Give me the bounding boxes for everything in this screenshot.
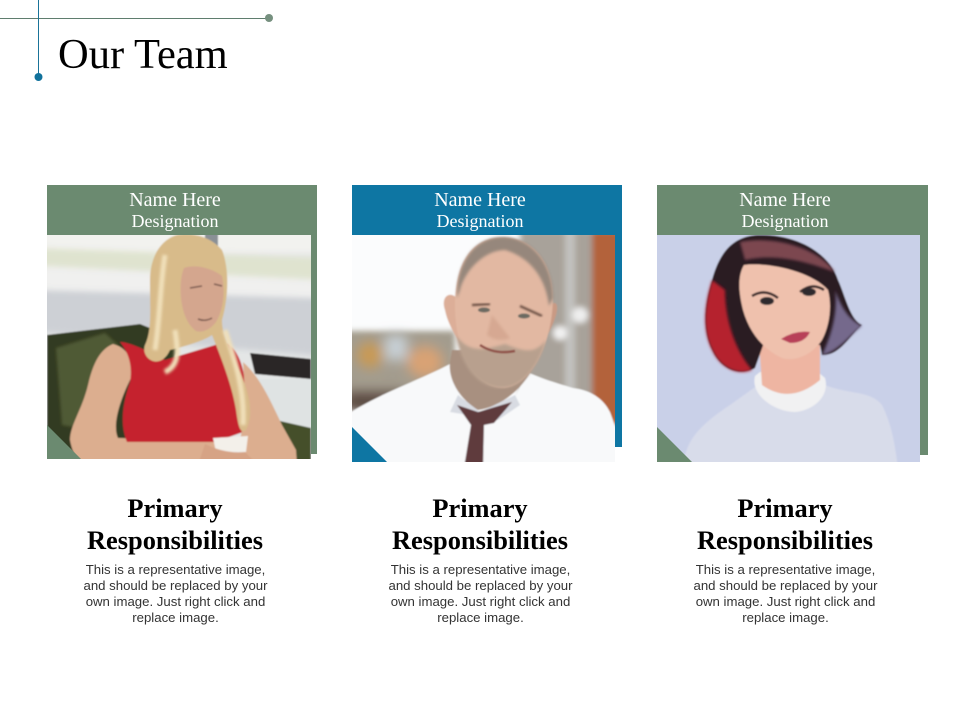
text block: responsibilities 1: and should be replaced by your — [83, 578, 268, 593]
text block: responsibilities 3: Primary — [737, 493, 833, 523]
text block: responsibilities 1 — [83, 493, 268, 625]
name and designation 3: Name Here — [739, 189, 831, 211]
name and designation 2: Designation — [436, 211, 524, 231]
text block: responsibilities 2: This is a representative image, — [391, 562, 570, 577]
text block: responsibilities 1: This is a representative image, — [86, 562, 265, 577]
text block: responsibilities 1: replace image. — [132, 610, 219, 625]
header decoration: crossed lines with dots — [0, 0, 273, 81]
text block: responsibilities 2: and should be replaced by your — [388, 578, 573, 593]
name and designation 3 — [739, 189, 831, 231]
backing shape 3 — [657, 185, 928, 455]
name and designation 2: Name Here — [434, 189, 526, 211]
corner triangle 1 — [47, 425, 81, 459]
panel: team member 3 — [650, 185, 928, 468]
panel: team member 2 — [345, 185, 622, 468]
text block: responsibilities 3: Responsibilities — [697, 525, 873, 555]
text block: responsibilities 3: This is a representative image, — [696, 562, 875, 577]
name and designation 1 — [129, 189, 221, 231]
name and designation 3: Designation — [742, 211, 828, 231]
text block: responsibilities 2: Primary — [432, 493, 528, 523]
panel: team member 1 — [40, 185, 320, 465]
name and designation 1: Designation — [132, 211, 218, 231]
backing shape 1 — [47, 185, 317, 454]
title: Our Team — [58, 31, 228, 78]
photo 2: man in white shirt and tie — [345, 230, 622, 468]
corner triangle 3 — [657, 427, 692, 462]
text block: responsibilities 2 — [388, 493, 573, 625]
text block: responsibilities 3: and should be replaced by your — [693, 578, 878, 593]
text block: responsibilities 2: replace image. — [437, 610, 524, 625]
name and designation 1: Name Here — [129, 189, 221, 211]
text block: responsibilities 1: Primary — [127, 493, 223, 523]
name and designation 2 — [434, 189, 526, 231]
backing shape 2 — [352, 185, 622, 447]
text block: responsibilities 3 — [693, 493, 878, 625]
photo 1: woman in red dress — [47, 235, 311, 459]
text block: responsibilities 2: Responsibilities — [392, 525, 568, 555]
photo 3: woman with short red hair — [650, 230, 925, 468]
text block: responsibilities 1: Responsibilities — [87, 525, 263, 555]
text block: responsibilities 2: own image. Just right click and — [391, 594, 570, 609]
text block: responsibilities 3: replace image. — [742, 610, 829, 625]
text block: responsibilities 1: own image. Just right click and — [86, 594, 265, 609]
corner triangle 2 — [352, 427, 387, 462]
text block: responsibilities 3: own image. Just right click and — [696, 594, 875, 609]
